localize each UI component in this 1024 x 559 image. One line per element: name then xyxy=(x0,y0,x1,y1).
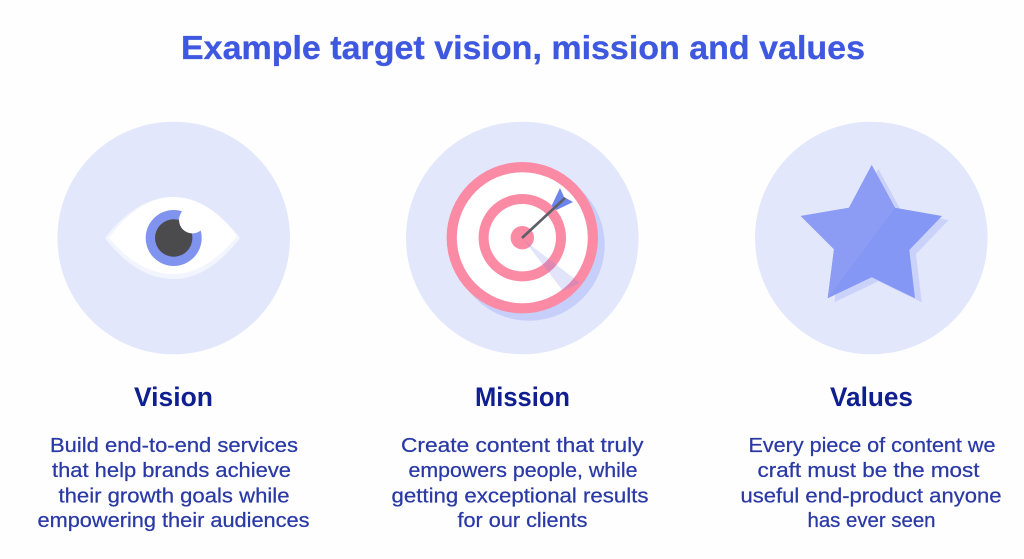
panel: vision xyxy=(38,122,310,532)
text: values description xyxy=(740,434,1002,532)
text: values description: useful end-product anyone xyxy=(740,484,1002,507)
icon: eye xyxy=(57,122,290,354)
heading: values: Values xyxy=(830,382,913,412)
text: values description: has ever seen xyxy=(808,509,936,532)
text: values description: craft must be the most xyxy=(758,459,980,482)
text: vision description: that help brands achieve xyxy=(52,459,291,482)
heading: vision: Vision xyxy=(134,382,213,412)
heading: mission: Mission xyxy=(475,382,570,412)
panel: values xyxy=(740,122,1002,532)
text: values description: Every piece of content we xyxy=(748,434,996,457)
text: vision description: empowering their audiences xyxy=(38,509,310,532)
panel: mission xyxy=(392,122,648,532)
text: mission description: empowers people, while xyxy=(408,459,638,482)
text: mission description: Create content that truly xyxy=(401,434,644,457)
text: vision description: Build end-to-end services xyxy=(50,434,298,457)
title: Example target vision, mission and values xyxy=(181,30,865,67)
icon: star xyxy=(755,122,988,354)
text: mission description xyxy=(392,434,648,532)
text: mission description: for our clients xyxy=(458,509,588,532)
text: vision description: their growth goals while xyxy=(58,484,290,507)
text: vision description xyxy=(38,434,310,532)
text: mission description: getting exceptional results xyxy=(392,484,648,507)
icon: target with arrow xyxy=(406,122,639,354)
